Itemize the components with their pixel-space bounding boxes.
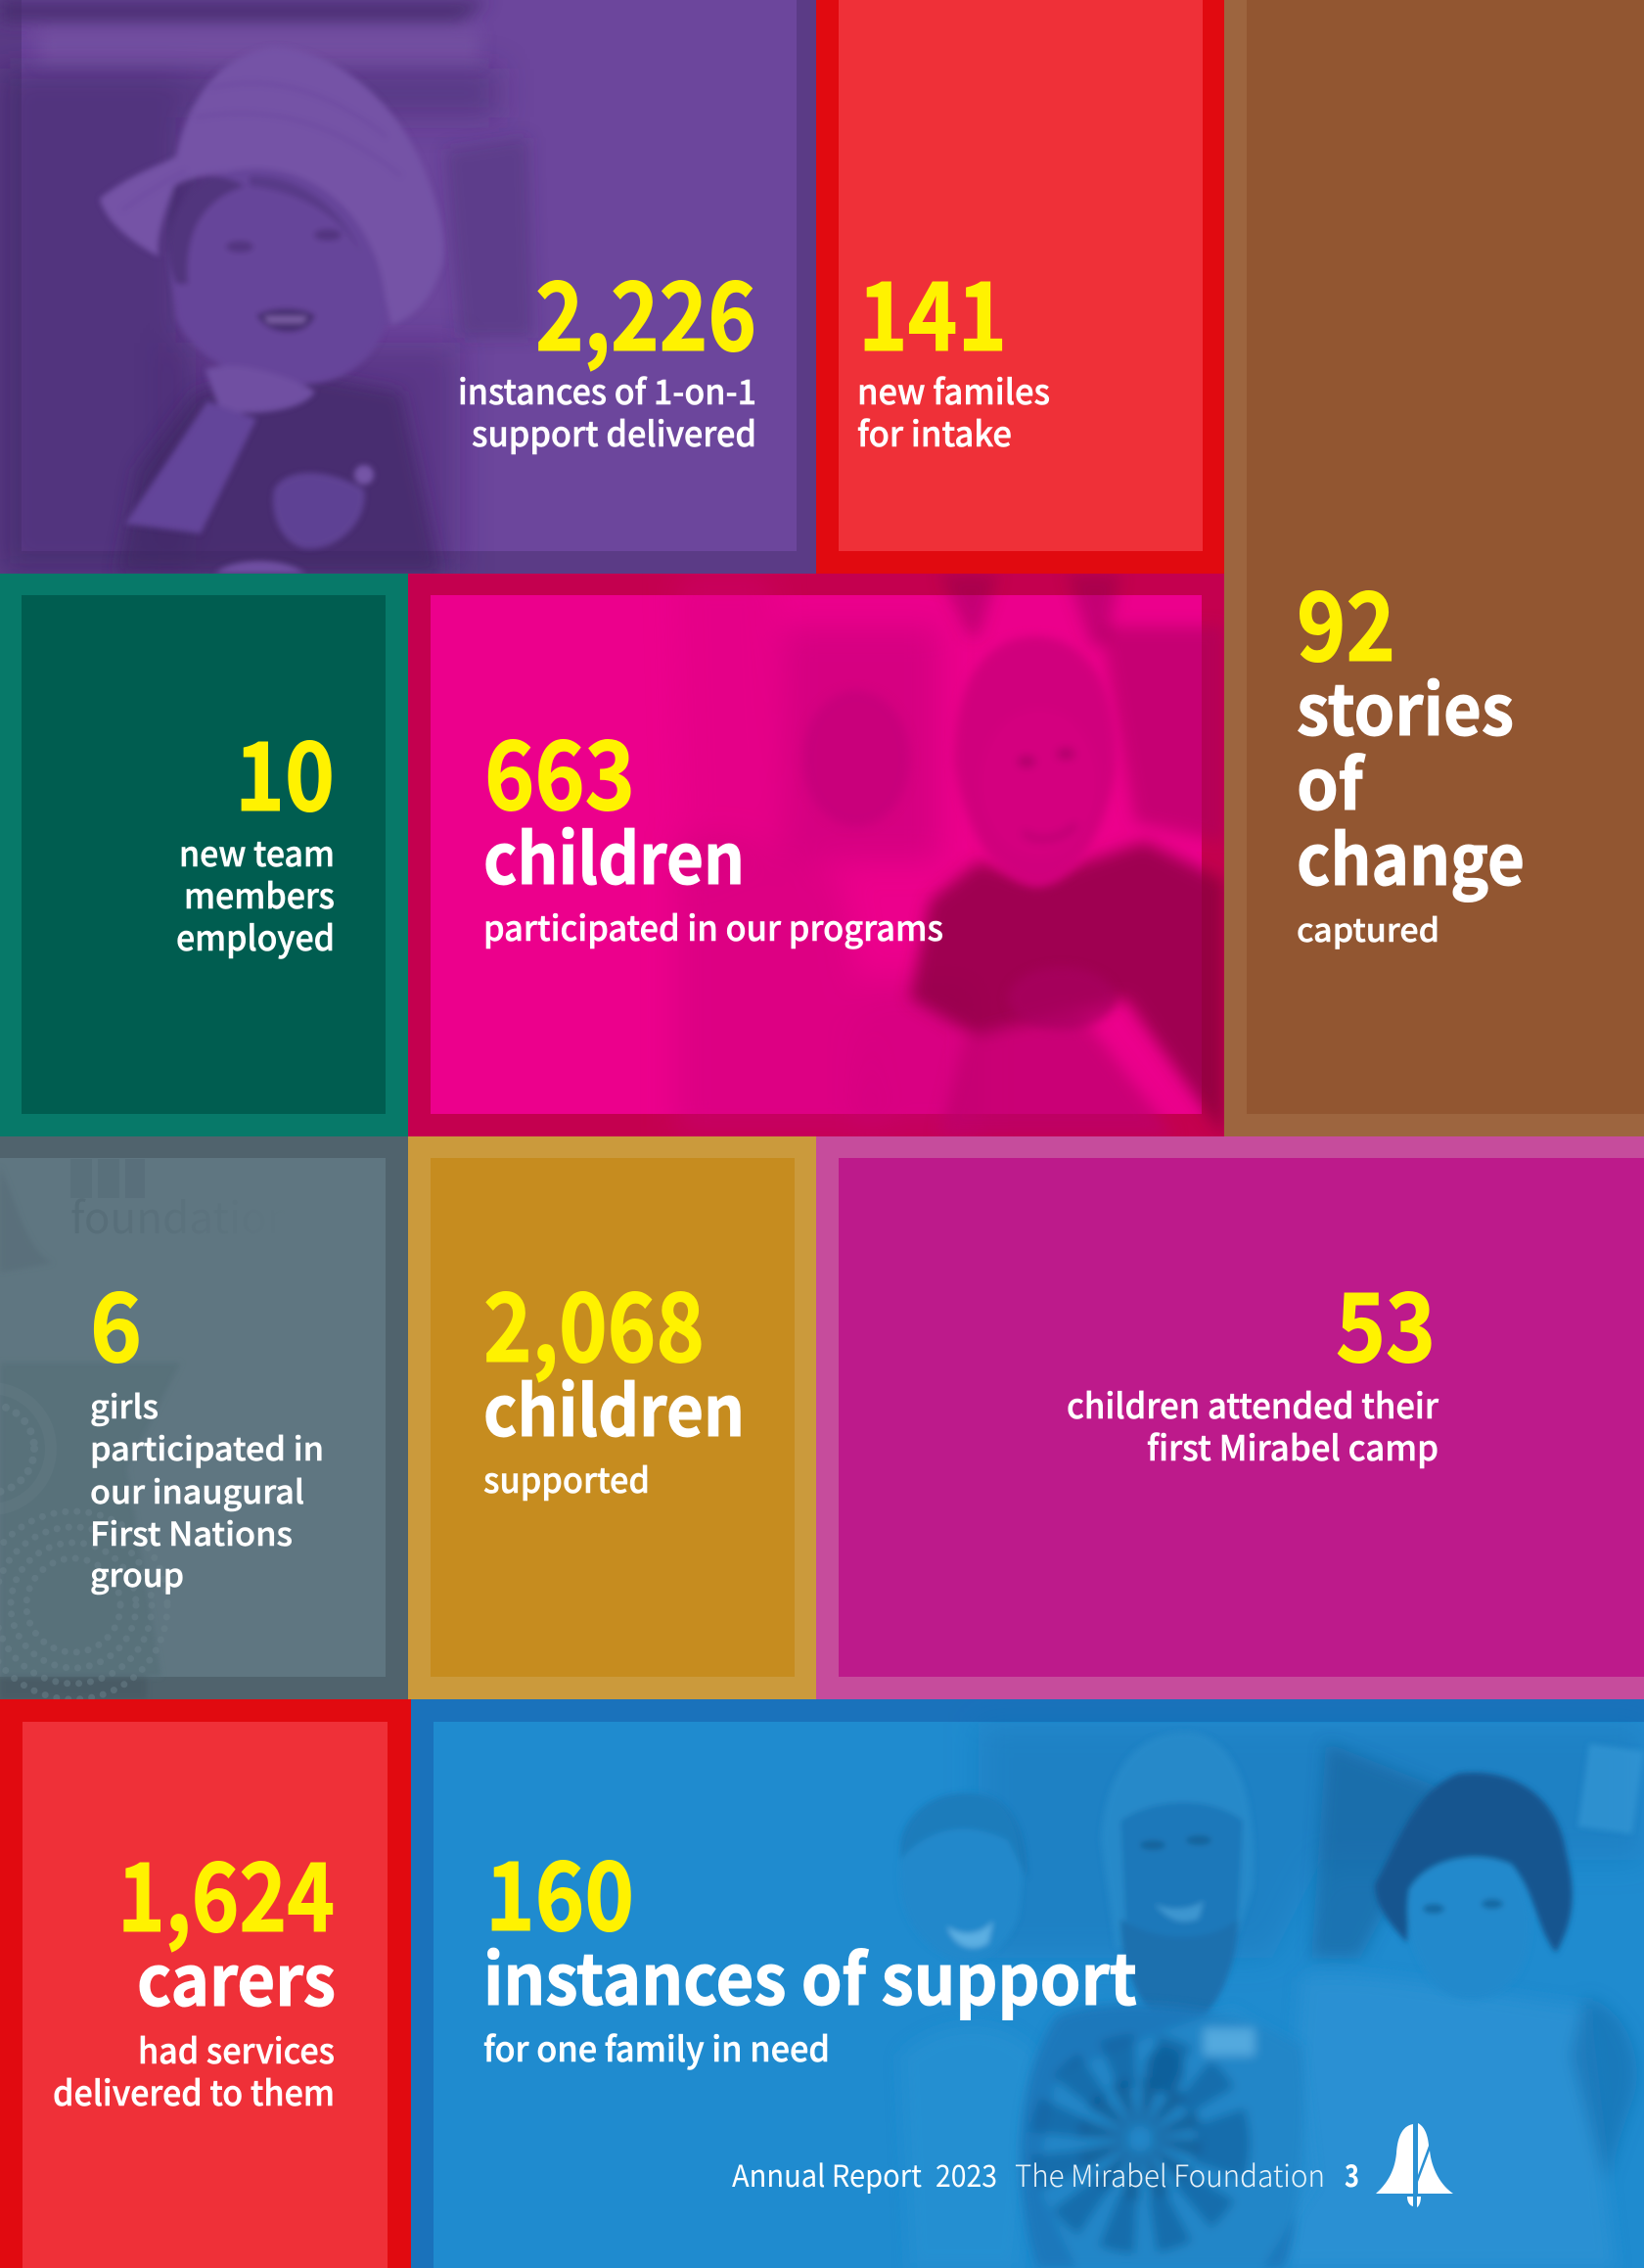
statistic: 1,624: 1,624 <box>117 1821 335 1959</box>
heading: stories of change: change <box>1297 806 1525 905</box>
heading: children: children <box>483 805 745 904</box>
caption: instances of 1-on-1 support delivered: instances of 1-on-1 <box>458 365 756 415</box>
caption: new familes for intake <box>857 365 1050 457</box>
heading: instances of support: instances of support <box>483 1925 1137 2025</box>
statistic: 2,226: 2,226 <box>535 240 756 378</box>
caption: had services delivered to them <box>53 2024 335 2116</box>
statistic: 6: 6 <box>90 1251 142 1389</box>
caption: instances of 1-on-1 support delivered: support delivered <box>472 407 756 457</box>
caption: girls participated in our inaugural First Nations group: participated in <box>90 1423 324 1470</box>
footer: report title and page number: Annual Report <box>732 2152 922 2196</box>
boy face <box>1404 1856 1537 1941</box>
statistic: 663: 663 <box>484 699 635 837</box>
caption: captured: captured <box>1297 904 1439 951</box>
photo: family of three <box>899 1723 1644 2268</box>
caption: had services delivered to them: delivered to them <box>53 2066 335 2116</box>
caption: had services delivered to them: had services <box>138 2024 335 2074</box>
statistic: 92: 92 <box>1297 550 1395 688</box>
caption: children attended their first Mirabel camp: children attended their <box>1067 1379 1439 1429</box>
heading: stories of change: of <box>1297 730 1365 830</box>
heading: stories of change: stories <box>1297 656 1514 756</box>
photo: dot painting and foundation banner <box>2 1198 153 1699</box>
statistic: 10: 10 <box>235 700 335 838</box>
panel: 53 first Mirabel camp <box>816 1136 1644 1699</box>
panel: 10 new team members <box>0 574 408 1136</box>
caption: new team members employed: new team <box>179 827 335 877</box>
panel: 92 stories of change <box>1224 0 1644 1136</box>
caption: girls participated in our inaugural First Nations group: girls <box>90 1381 159 1428</box>
heading: children: children <box>483 1357 745 1457</box>
caption: children attended their first Mirabel camp: first Mirabel camp <box>1147 1421 1438 1471</box>
panel: 6 girls First Nations group <box>0 1136 408 1699</box>
caption: new team members employed <box>176 827 335 961</box>
footer: report title and page number: The Mirabel Foundation <box>1015 2152 1325 2196</box>
icon: Mirabel bell logo <box>1376 2123 1453 2207</box>
caption: new familes for intake: for intake <box>857 407 1012 457</box>
caption: instances of 1-on-1 support delivered <box>458 365 756 457</box>
panel: 2,068 children <box>408 1136 816 1699</box>
caption: new team members employed: members <box>184 869 335 919</box>
panel: 2,226 instances of 1-on-1 support <box>0 0 816 574</box>
statistic: 2,068: 2,068 <box>483 1251 705 1389</box>
caption: girls participated in our inaugural First Nations group: group <box>90 1550 184 1597</box>
boy hat <box>1375 1773 1573 1953</box>
panel: 141 new familes <box>816 0 1224 574</box>
caption: girls participated in our inaugural First Nations group: First Nations <box>90 1508 293 1555</box>
heading: stories of change <box>1297 656 1525 905</box>
caption: for one family in need: for one family in need <box>483 2022 830 2072</box>
woman head <box>906 1793 1022 1953</box>
caption: girls participated in our inaugural First Nations group: our inaugural <box>90 1466 304 1513</box>
caption: participated in our programs: participated in our programs <box>483 902 943 951</box>
caption: new team members employed: employed <box>176 911 335 961</box>
panel: 663 children <box>408 574 1224 1136</box>
footer: report title and page number <box>732 2152 1359 2196</box>
statistic: 160: 160 <box>485 1820 634 1958</box>
panel: 160 instances of support <box>411 1699 1644 2268</box>
photo: child in sun hat <box>0 0 533 574</box>
statistic: 53: 53 <box>1336 1251 1436 1389</box>
faint banner text: foundation <box>70 1183 294 1246</box>
footer: report title and page number: 3 <box>1345 2152 1359 2196</box>
photo: two children smiling <box>675 574 1224 1136</box>
caption: girls participated in our inaugural First Nations group <box>90 1381 324 1597</box>
caption: children attended their first Mirabel camp <box>1067 1379 1439 1471</box>
man hair and face <box>1101 1732 1254 1948</box>
tie-dye shirt <box>1021 2005 1316 2268</box>
heading: carers: carers <box>137 1926 336 2026</box>
panel: 1,624 carers <box>0 1699 411 2268</box>
footer: report title and page number: 2023 <box>936 2152 997 2196</box>
statistic: 141: 141 <box>858 240 1007 378</box>
man beard <box>1119 1921 1239 2013</box>
caption: supported: supported <box>483 1454 650 1504</box>
caption: new familes for intake: new familes <box>857 365 1050 415</box>
